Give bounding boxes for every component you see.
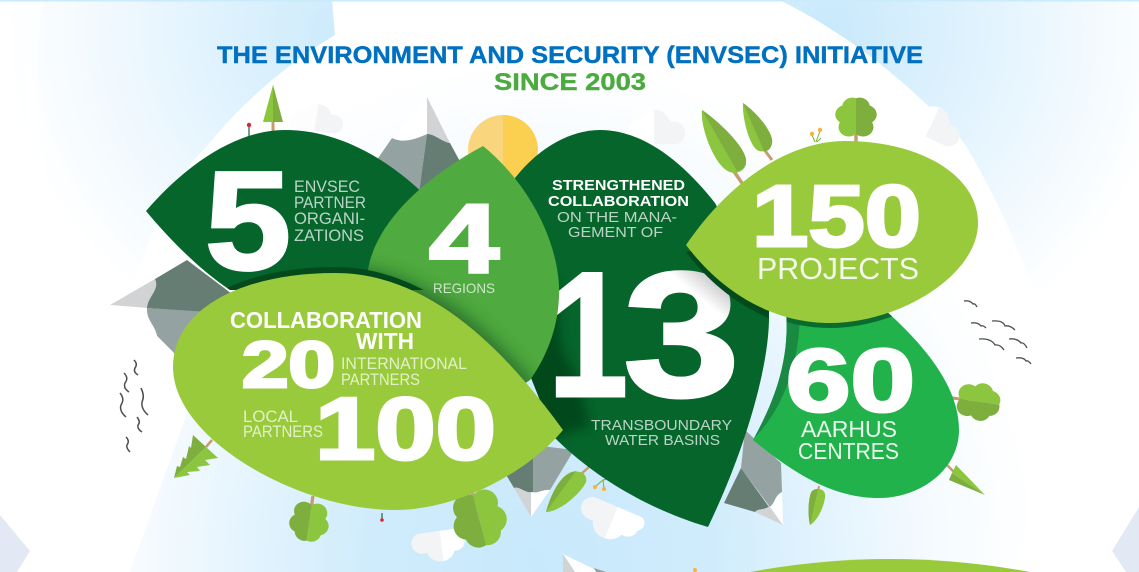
shadow under leaf 100 on leaf 5 xyxy=(227,267,424,290)
number 150: 150 xyxy=(752,168,921,265)
icon: triangle pine right xyxy=(947,465,985,495)
icon: leaf tree 1 xyxy=(702,110,746,186)
number 13: 1 xyxy=(548,235,628,434)
icon: leaf tree bottom right xyxy=(808,486,825,525)
number 60: 60 xyxy=(786,330,915,430)
heading: strengthened collaboration xyxy=(548,178,689,241)
title: THE ENVIRONMENT AND SECURITY (ENVSEC) INITIATIVE xyxy=(217,42,923,69)
icon: round tree top right xyxy=(835,98,877,143)
icon: pine tree top left xyxy=(263,85,283,132)
icon: big tree bottom xyxy=(445,480,513,553)
panel: 5 partner organizations xyxy=(146,130,430,299)
number 100: 100 xyxy=(315,379,496,478)
label: international partners xyxy=(341,354,467,389)
label: local partners: LOCAL xyxy=(243,407,298,426)
icon: orange flower bottom xyxy=(693,568,697,572)
heading: strengthened collaboration: COLLABORATION xyxy=(548,194,689,210)
heading: collaboration with: WITH xyxy=(356,328,414,354)
title: SINCE 2003 xyxy=(494,69,646,96)
shadow from lower leaf xyxy=(368,260,535,382)
label: local partners xyxy=(243,407,323,441)
label: partner organizations: ZATIONS xyxy=(294,226,364,245)
label: international partners: INTERNATIONAL xyxy=(341,354,467,373)
label: partner organizations xyxy=(294,177,366,245)
label: transboundary water basins xyxy=(591,417,732,449)
title xyxy=(217,42,923,96)
icon: mountain top centre xyxy=(370,97,470,200)
heading: strengthened collaboration: GEMENT OF xyxy=(568,224,663,241)
shadow band xyxy=(754,317,800,438)
label: international partners: PARTNERS xyxy=(341,370,420,389)
icon: cloud top centre xyxy=(625,110,685,144)
number 13: 3 xyxy=(623,235,740,434)
birds right xyxy=(964,301,1031,364)
icon: mountain bottom right xyxy=(724,430,783,525)
label: projects: PROJECTS xyxy=(757,251,919,286)
shadow under leaf 150 xyxy=(686,251,769,318)
label: partner organizations: ORGANI- xyxy=(294,209,365,228)
icon: round tree bottom left xyxy=(287,493,333,544)
label: transboundary water basins: TRANSBOUNDARY xyxy=(591,417,732,434)
panel: 13 transboundary water basins xyxy=(500,130,769,527)
icon: round tree right xyxy=(948,379,1002,423)
icon: cloud bottom centre xyxy=(573,494,647,551)
icon: leaf tree bottom centre xyxy=(546,467,589,512)
panel: 60 Aarhus centres xyxy=(745,300,959,498)
label: partner organizations: ENVSEC xyxy=(294,177,360,196)
icon: jagged pine bottom left xyxy=(174,435,218,478)
icon: orange flowers bottom xyxy=(593,479,608,491)
shadow on leaf xyxy=(531,283,591,440)
label: Aarhus centres xyxy=(798,416,899,464)
heading: strengthened collaboration: ON THE MANA- xyxy=(557,209,677,226)
panel: 4 regions xyxy=(368,146,560,383)
icon: cloud top left xyxy=(289,100,345,135)
label: transboundary water basins: WATER BASINS xyxy=(605,432,720,449)
label: local partners: PARTNERS xyxy=(243,422,323,441)
icon: cloud bottom left xyxy=(410,527,471,565)
leaf bottom green hump xyxy=(750,559,1030,572)
label: partner organizations: PARTNER xyxy=(294,193,366,212)
icon: snow peak bottom xyxy=(563,554,606,572)
icon: red flower bottom xyxy=(380,513,384,522)
number 4: 4 xyxy=(429,184,499,293)
number 5: 5 xyxy=(205,142,291,299)
label: Aarhus centres: CENTRES xyxy=(798,438,899,464)
icon: mountain bottom centre xyxy=(505,445,574,517)
number 20: 20 xyxy=(242,328,335,401)
birds left xyxy=(120,360,148,452)
label: Aarhus centres: AARHUS xyxy=(801,416,897,442)
shadow under leaf 150 on leaf 60 xyxy=(786,312,892,328)
icon: red flower top xyxy=(247,123,251,136)
icon: sun xyxy=(468,115,538,185)
number 13 xyxy=(548,235,740,434)
icon: leaf tree 2 xyxy=(743,103,772,160)
icon: mountain left xyxy=(110,260,240,370)
heading: collaboration with xyxy=(230,307,422,354)
panel: collaboration with partners xyxy=(173,273,563,510)
icon: yellow flowers xyxy=(810,128,822,142)
heading: collaboration with: COLLABORATION xyxy=(230,307,422,333)
heading: strengthened collaboration: STRENGTHENED xyxy=(552,178,685,194)
icon: cloud top right xyxy=(900,95,968,150)
panel: 150 projects xyxy=(686,141,978,323)
label: regions: REGIONS xyxy=(433,280,495,296)
